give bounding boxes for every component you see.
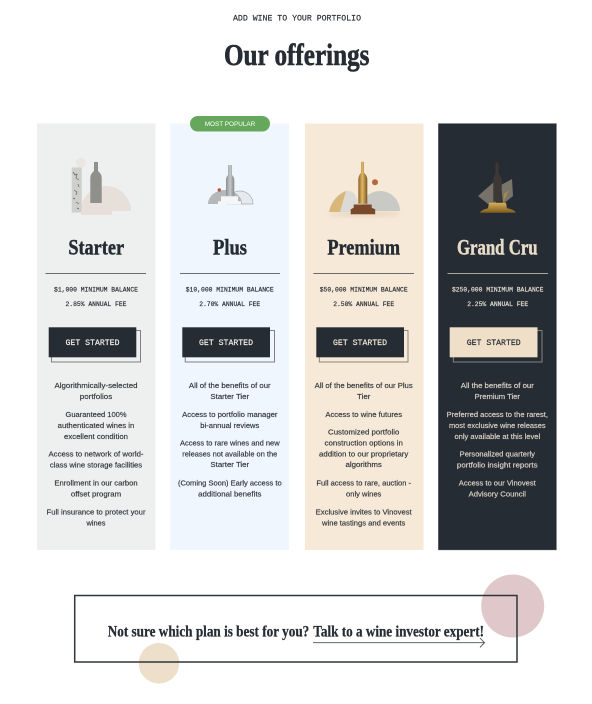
- benefits list: offset program: [71, 490, 121, 498]
- benefits list: releases not available on the: [182, 449, 277, 458]
- icon: plus silver bottle: [208, 165, 253, 204]
- benefits list: Guaranteed 100%: [66, 410, 127, 419]
- heading: Plus: Plus: [213, 234, 247, 259]
- benefits list: algorithms: [346, 460, 382, 469]
- benefits list: Full access to rare, auction -: [316, 478, 412, 488]
- callout link: Talk to a wine investor expert!: [313, 624, 484, 641]
- benefits list: bi-annual reviews: [200, 421, 260, 430]
- minimum balance: $50,000 MINIMUM BALANCE: [320, 287, 408, 295]
- panel: Premium tier: [305, 124, 424, 550]
- benefits list: Enrollment in our carbon: [54, 478, 138, 488]
- benefits list: Personalized quarterly: [460, 450, 535, 458]
- button: get started: [182, 327, 274, 362]
- button: get started: GET STARTED: [66, 339, 120, 348]
- benefits list: construction options in: [325, 438, 403, 448]
- annual fee: 2.85% ANNUAL FEE: [66, 301, 126, 309]
- benefits list: Premium Tier: [475, 392, 520, 401]
- benefits list: Full insurance to protect your: [46, 508, 146, 516]
- benefits list: Advisory Council: [469, 490, 526, 498]
- heading: Grand Cru: Grand Cru: [457, 234, 538, 259]
- button: get started: GET STARTED: [333, 339, 387, 348]
- benefits list: Algorithmically-selected: [54, 381, 138, 390]
- arrow: [313, 638, 484, 647]
- benefits list: only available at this level: [454, 432, 540, 441]
- minimum balance: $10,000 MINIMUM BALANCE: [186, 287, 274, 295]
- benefits list: Access to wine futures: [325, 410, 402, 419]
- benefits list: portfolios: [80, 392, 112, 401]
- benefits list: All of the benefits of our Plus: [315, 381, 413, 390]
- annual fee: 2.50% ANNUAL FEE: [333, 301, 394, 309]
- benefits list: [315, 381, 413, 528]
- benefits list: Preferred access to the rarest,: [447, 410, 548, 419]
- benefits list: Access to network of world-: [48, 450, 144, 458]
- annual fee: 2.70% ANNUAL FEE: [199, 301, 260, 309]
- decorative circle: pink: [481, 574, 544, 638]
- button: get started: GET STARTED: [199, 339, 253, 348]
- benefits list: Access to portfolio manager: [182, 410, 278, 419]
- benefits list: most exclusive wine releases: [449, 421, 546, 430]
- benefits list: Access to rare wines and new: [180, 438, 280, 447]
- badge: most popular: MOST POPULAR: [205, 121, 256, 128]
- minimum balance: $1,000 MINIMUM BALANCE: [54, 287, 138, 295]
- benefits list: addition to our proprietary: [319, 449, 409, 458]
- benefits list: excellent condition: [64, 432, 128, 441]
- heading: Premium: Premium: [327, 234, 400, 259]
- icon: starter marble bottle: [72, 158, 131, 215]
- benefits list: All of the benefits of our: [189, 381, 271, 390]
- panel: Starter tier: [37, 124, 156, 550]
- benefits list: [178, 381, 282, 498]
- button: get started: [450, 327, 542, 362]
- panel: Grand Cru tier: [438, 124, 556, 550]
- button: get started: [49, 327, 141, 362]
- benefits list: Access to our Vinovest: [459, 478, 537, 488]
- benefits list: wine tastings and events: [321, 518, 406, 528]
- benefits list: All the benefits of our: [461, 381, 534, 390]
- icon: grand cru dark bottle: [478, 163, 516, 213]
- annual fee: 2.25% ANNUAL FEE: [467, 301, 528, 309]
- callout question: Not sure which plan is best for you?: [108, 624, 309, 641]
- eyebrow heading: ADD WINE TO YOUR PORTFOLIO: [233, 14, 361, 24]
- benefits list: only wines: [346, 490, 382, 498]
- callout frame: [75, 596, 517, 662]
- benefits list: authenticated wines in: [58, 421, 134, 430]
- panel: Plus tier: [170, 116, 289, 550]
- benefits list: additional benefits: [198, 490, 262, 498]
- heading: Starter: Starter: [68, 234, 124, 259]
- benefits list: portfolio insight reports: [457, 460, 538, 470]
- benefits list: [447, 381, 548, 498]
- decorative circle: tan: [139, 643, 179, 684]
- benefits list: Customized portfolio: [328, 428, 399, 437]
- benefits list: Starter Tier: [210, 460, 250, 469]
- benefits list: [46, 381, 146, 528]
- callout: talk to an expert: [75, 574, 544, 684]
- icon: premium gold bottle: [328, 162, 400, 217]
- button: get started: GET STARTED: [467, 339, 521, 348]
- benefits list: (Coming Soon) Early access to: [178, 478, 282, 488]
- title: Our offerings: [224, 37, 369, 72]
- benefits list: wines: [86, 518, 106, 528]
- benefits list: Starter Tier: [210, 392, 250, 401]
- badge: most popular: [190, 116, 270, 132]
- benefits list: Tier: [357, 392, 371, 401]
- benefits list: Exclusive invites to Vinovest: [316, 508, 413, 516]
- benefits list: class wine storage facilities: [50, 460, 142, 470]
- minimum balance: $250,000 MINIMUM BALANCE: [452, 287, 543, 295]
- button: get started: [316, 327, 408, 362]
